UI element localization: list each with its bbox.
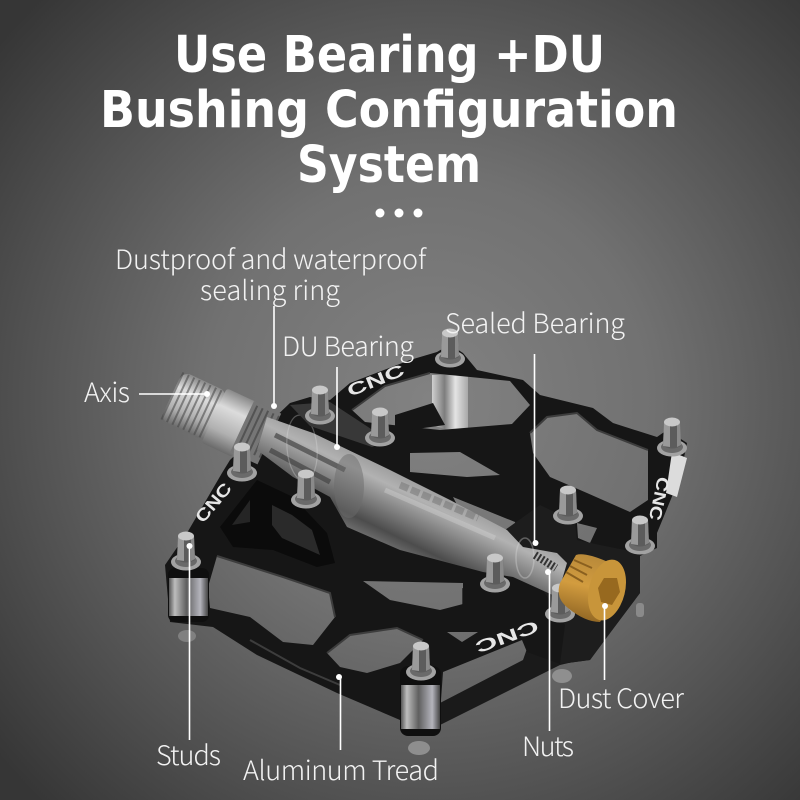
label: axis <box>84 371 210 410</box>
dots divider <box>376 208 422 218</box>
label: studs: Studs <box>156 734 221 773</box>
label: DU bearing <box>282 325 414 450</box>
CNC markings: CNC <box>473 616 541 657</box>
label: sealed bearing: Sealed Bearing <box>445 302 625 341</box>
dark block beneath the plate <box>462 588 500 640</box>
title: Bushing Configuration <box>100 81 678 140</box>
CNC markings: CNC <box>192 479 236 527</box>
plate edge over the tube <box>290 402 388 447</box>
pedal illustration <box>159 328 687 755</box>
label: DU bearing: DU Bearing <box>282 325 414 364</box>
axle end block <box>505 505 640 664</box>
CNC markings <box>192 361 673 657</box>
right spacer sliver <box>666 452 687 497</box>
arm joining the rear spacer <box>395 403 445 432</box>
title: System <box>297 136 481 195</box>
title: Use Bearing +DU <box>174 26 605 85</box>
studs <box>171 328 687 680</box>
label: nuts: Nuts <box>522 725 574 764</box>
CNC markings: CNC <box>645 475 673 522</box>
front and left spacers <box>168 568 441 736</box>
label: axis: Axis <box>84 371 130 410</box>
transparent axle tube <box>257 414 567 597</box>
gold dust cover <box>559 554 632 624</box>
label: dust cover <box>558 603 684 716</box>
bridge cut-out by the axle <box>220 480 335 567</box>
label: dustproof ring: sealing ring <box>200 269 340 308</box>
label: studs <box>156 543 221 773</box>
axle threaded end and collar <box>159 368 281 468</box>
label: sealed bearing <box>445 302 625 546</box>
rear spacer and bottom pins <box>178 375 644 755</box>
label: aluminum tread: Aluminum Tread <box>243 749 439 788</box>
label: dustproof ring: Dustproof and waterproof <box>115 238 427 277</box>
rim highlights on the tread <box>217 373 648 685</box>
main aluminium tread <box>165 348 687 720</box>
lower plate arm <box>440 640 590 725</box>
label: nuts <box>522 569 574 764</box>
title <box>100 26 678 195</box>
label: dustproof ring <box>115 238 427 409</box>
CNC markings: CNC <box>344 361 407 401</box>
label: aluminum tread <box>243 674 439 788</box>
label: dust cover: Dust Cover <box>558 677 684 716</box>
